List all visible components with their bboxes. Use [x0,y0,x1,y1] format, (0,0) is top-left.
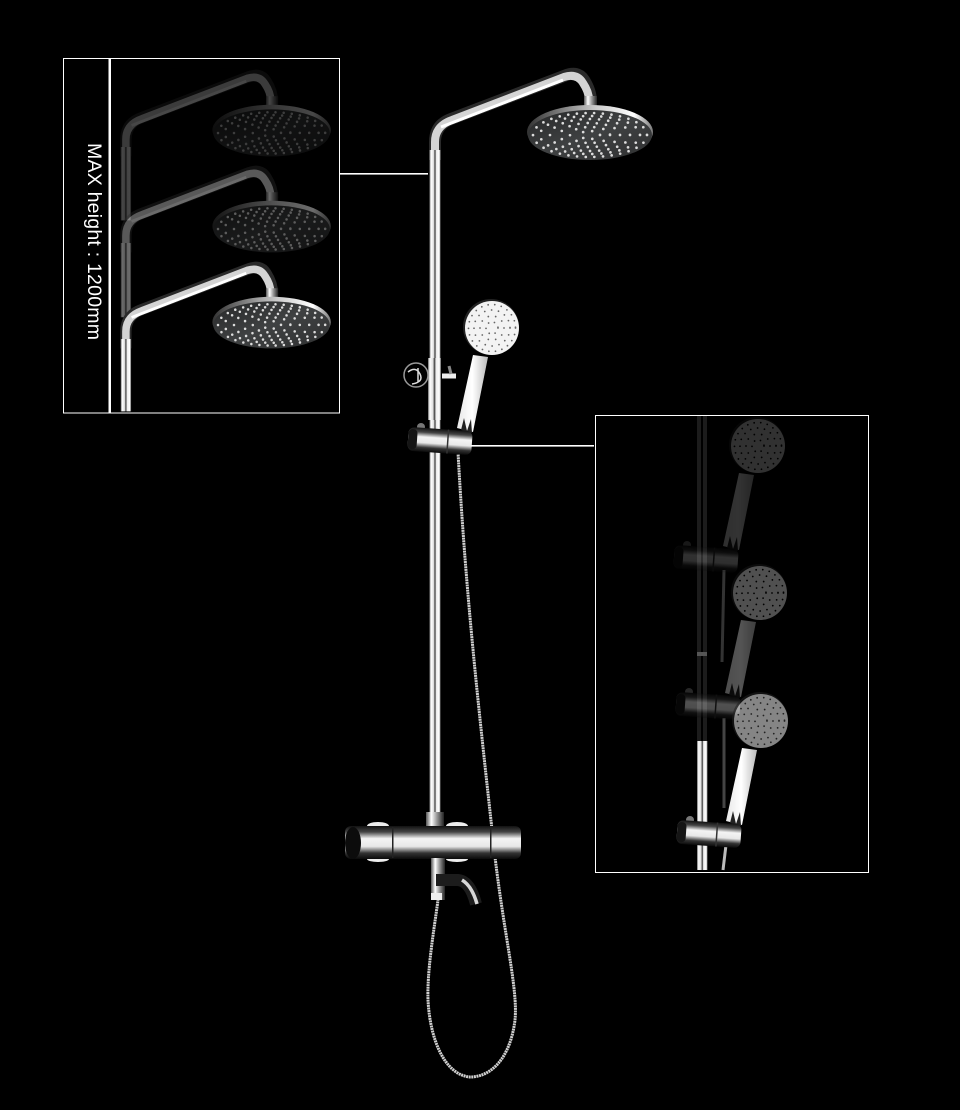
panel frame with height label column [64,58,340,413]
main product: shower system [345,74,653,1077]
wall bracket [404,363,456,387]
connector line: height panel to riser [340,173,428,175]
hand shower position: lowest, bright [676,692,788,848]
hose segments [722,570,726,870]
hand shower position: highest, faded [673,417,785,573]
panel: hand shower adjustment [596,416,868,872]
riser collar [428,358,441,420]
hand shower with slide holder [407,299,519,455]
bath spout [431,858,477,904]
panel: max height of the rain shower [64,58,340,424]
hand shower position: middle, faded [675,564,787,720]
sliding riser pipe [430,230,440,820]
vertical label: max height: MAX height : 1200mm [83,143,105,340]
flexible hose [428,452,515,1077]
sliding rail, faded to bright [697,416,708,870]
rain shower arm and head [430,74,653,240]
wall flanges [367,822,468,862]
connector line: holder to hand shower panel [471,445,594,447]
rain shower position: highest, faded [121,75,331,232]
thermostatic mixer body [345,812,521,859]
rain shower position: middle, faded [121,171,331,328]
panel frame [596,416,868,872]
rain shower position: lowest, bright [121,267,331,424]
